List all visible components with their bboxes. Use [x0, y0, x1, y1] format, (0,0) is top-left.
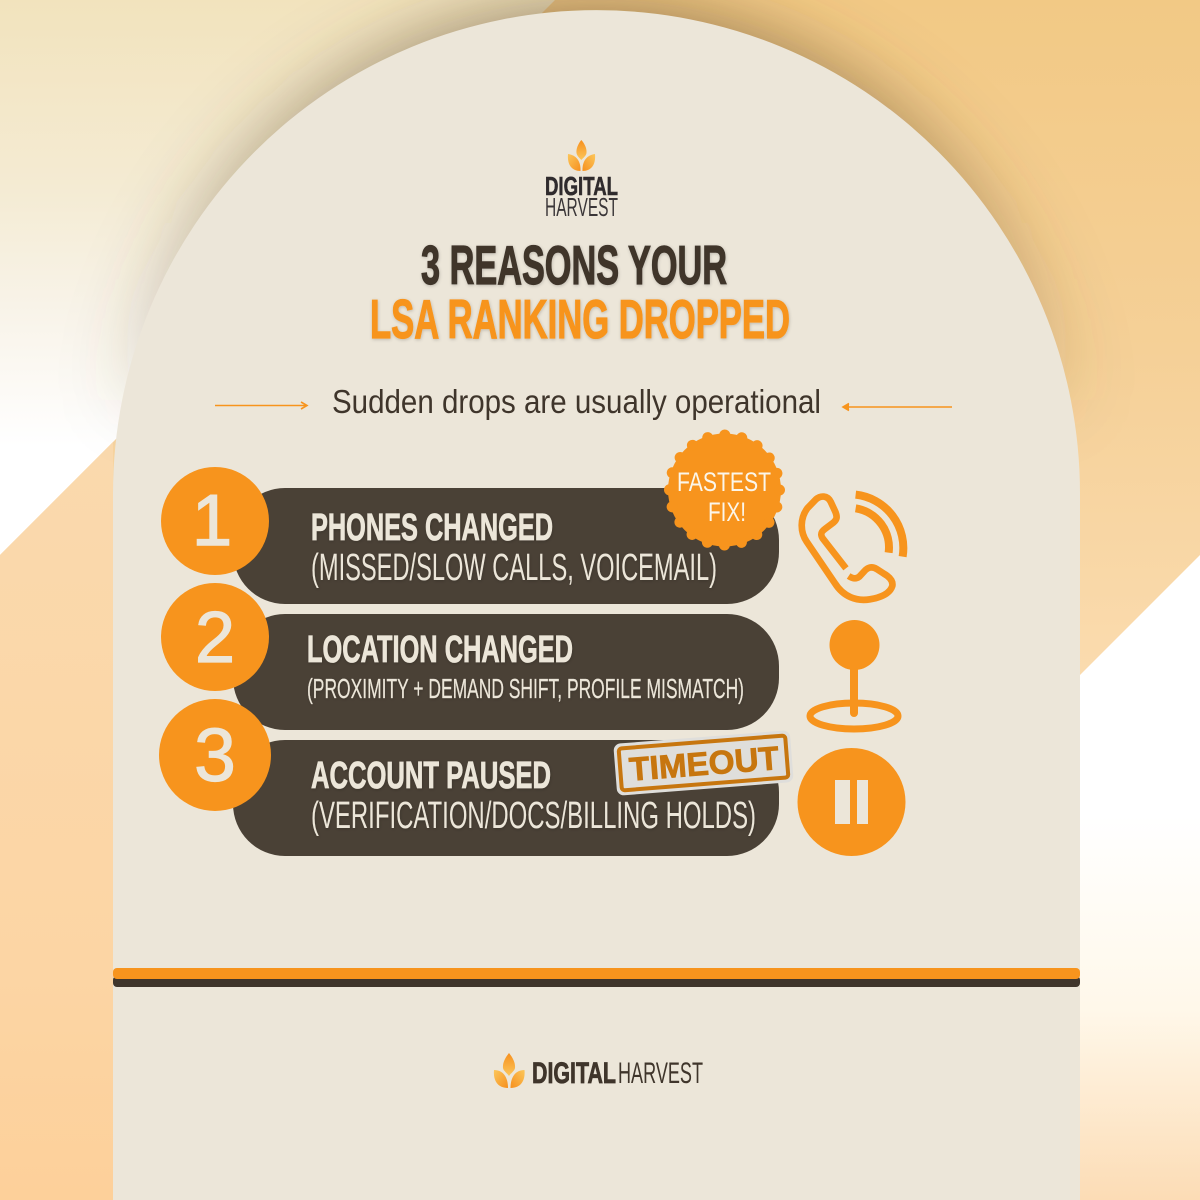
panel: arch — [113, 10, 1080, 1200]
number 1 — [161, 467, 269, 575]
badge: fastest fix: FASTEST — [677, 467, 771, 497]
number 3: 3 — [194, 713, 236, 797]
panel: reason 1 — [161, 467, 779, 604]
arrow: left — [215, 402, 307, 409]
footer logo — [494, 1053, 703, 1090]
stamp: timeout: TIMEOUT — [628, 739, 780, 788]
icon: pause — [798, 748, 906, 856]
arch shadow — [122, 9, 1071, 400]
number 2: 2 — [195, 598, 235, 678]
icon: wheat leaves — [568, 140, 595, 171]
logo: Digital Harvest stacked: HARVEST — [545, 192, 618, 222]
number 3 — [159, 699, 271, 811]
number 1: 1 — [192, 481, 232, 561]
icon: wheat leaves — [494, 1053, 525, 1088]
reason 1 text — [311, 507, 717, 589]
title: LSA RANKING DROPPED — [370, 288, 790, 350]
arrow: right — [843, 404, 952, 410]
logo: Digital Harvest stacked — [545, 140, 618, 222]
reason 1 text: (MISSED/SLOW CALLS, VOICEMAIL) — [311, 547, 717, 589]
number 2 — [161, 583, 269, 691]
divider bars — [113, 968, 1080, 987]
reason 3 text — [311, 755, 756, 837]
title: 3 REASONS YOUR — [421, 234, 727, 296]
reason 2 text: (PROXIMITY + DEMAND SHIFT, PROFILE MISMATCH) — [307, 673, 744, 704]
reason 2 text — [307, 629, 744, 704]
badge: fastest fix: FIX! — [708, 497, 746, 527]
footer logo: HARVEST — [618, 1057, 703, 1090]
panel: reason 3 — [159, 699, 779, 856]
logo: Digital Harvest stacked: DIGITAL — [545, 171, 618, 201]
panel: reason 2 — [161, 583, 779, 730]
icon: phone — [802, 495, 903, 600]
reason 1 text: PHONES CHANGED — [311, 507, 553, 549]
stamp: timeout — [613, 730, 794, 796]
reason 2 text: LOCATION CHANGED — [307, 629, 573, 671]
reason 3 text: ACCOUNT PAUSED — [311, 755, 551, 797]
footer logo: DIGITAL — [532, 1057, 616, 1090]
subtitle: Sudden drops are usually operational — [332, 383, 821, 420]
badge: fastest fix — [668, 434, 781, 546]
reason 3 text: (VERIFICATION/DOCS/BILLING HOLDS) — [311, 795, 756, 837]
title — [370, 234, 790, 350]
icon: location pin — [810, 620, 898, 729]
